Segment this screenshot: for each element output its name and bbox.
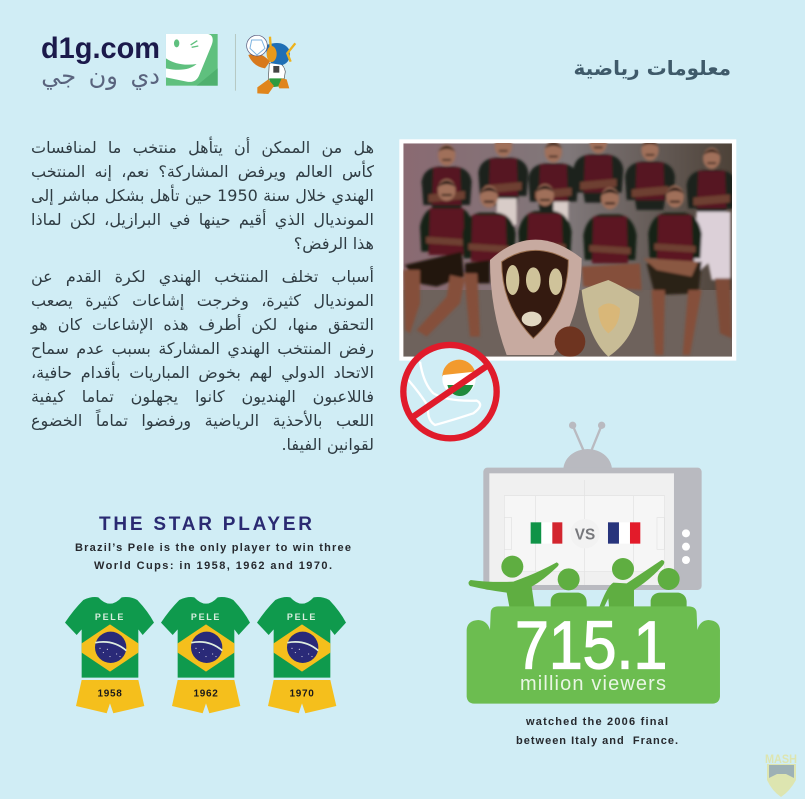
VS badge [570,519,600,548]
icon: green winking face logo [166,34,218,86]
logo: d1g.com [41,32,160,90]
photo: Indian football team [399,132,737,361]
logo: d1g.com: d1g.com [41,32,160,65]
text block: Pele description: Brazil’s Pele is the only player to win three [75,542,351,554]
icon: television [483,422,702,590]
stat: 715.1: 715.1 [515,608,667,683]
title: معلومات رياضية [574,56,731,80]
icon: Pele kit 1970: 1970 [290,688,314,699]
icon: no bare feet sign with Indian ball [403,345,497,438]
text block: Arabic question paragraph [31,136,374,253]
text block: Pele description [75,542,351,572]
icon: cheering people [468,556,687,610]
icon: Pele kit 1958: 1958 [98,688,122,699]
text: لقوانين الفيفا. [281,435,374,454]
logo: d1g.com: دي ون جي [41,62,160,90]
text: رفض المنتخب الهندي المشاركة بسبب عدم سماح [31,339,374,358]
text: فاللاعبون الهنديون كانوا يجهلون تماما كيفية [31,387,374,406]
text: التحقق منها، لكن أطرف هذه الإشاعات كان هو [31,315,374,334]
text: المونديال كثيرة، وخرجت إشاعات كثيرة يصعب [31,291,374,310]
text: هذا الرفض؟ [294,234,374,253]
text: الاتحاد الدولي لهم بخوض المباريات بأقدام حافية، [31,363,374,382]
icon: Pele kit 1970 [257,597,346,713]
text: أسباب تخلف المنتخب الهندي لكرة القدم عن [31,267,374,286]
icon: Pele kit 1958 [65,597,154,713]
icon: watermark shield: MASH [765,752,797,766]
icon: Italy flag [531,522,562,544]
icon: France flag [608,522,640,544]
text block: 2006 final caption: watched the 2006 final [525,716,668,728]
icon: Pele kit 1962: 1962 [194,688,218,699]
panel: the star player [65,514,351,713]
text block: Pele description: World Cups: in 1958, 1962 and 1970. [94,560,332,572]
icon: watermark shield [765,752,797,797]
icon: Pele kit 1962 [161,597,250,713]
text: كأس العالم ويرفض المشاركة؟ نعم، إنه المنتخب [31,162,374,181]
text block: 2006 final caption: between Italy and France. [516,735,678,747]
text block: 2006 final caption [516,716,678,747]
text: المونديال الذي أقيم حينها في البرازيل، لكن لماذا [31,210,374,229]
icon: Fuleco mascot with ball [235,34,295,94]
icon: green sofa [467,606,720,704]
stat label: million viewers: million viewers [520,673,666,695]
text: الهندي خلال سنة 1950 حين تأهل بشكل مباشر إلى [31,186,374,205]
text: هل من الممكن أن يتأهل منتخب ما لمنافسات [31,138,374,157]
text: اللعب بالأحذية الرياضية ورفضوا تماماً الخضوع [31,411,374,430]
text block: Arabic explanation paragraph [30,266,374,454]
panel: TV viewers illustration [467,422,720,704]
heading: the star player: THE STAR PLAYER [99,514,312,535]
VS badge: VS [575,526,595,543]
